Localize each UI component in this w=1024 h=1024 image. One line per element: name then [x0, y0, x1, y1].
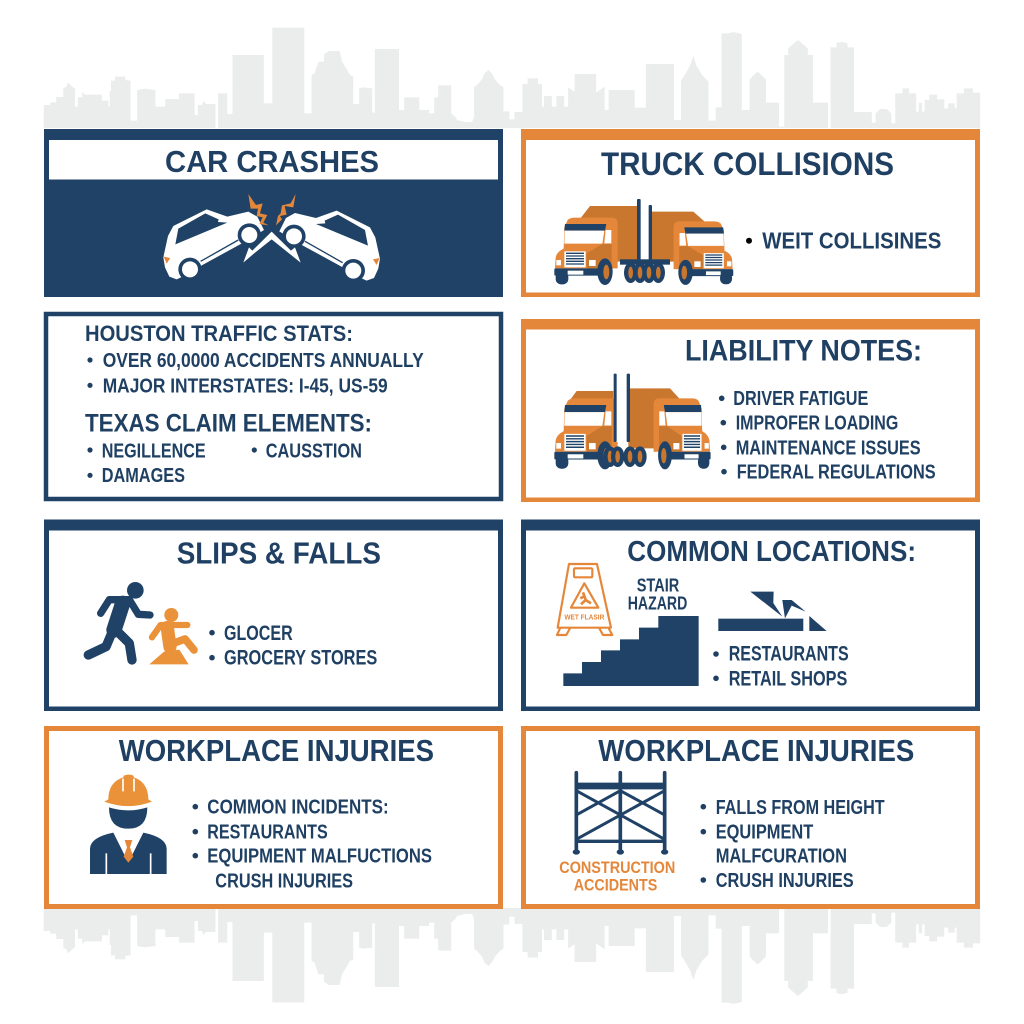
icon label: stair hazard	[628, 575, 687, 614]
heading: texas claim elements: TEXAS CLAIM ELEMENTS:	[85, 409, 372, 437]
list: common incidents: COMMON INCIDENTS:	[207, 797, 389, 819]
scaffold label: construction accidents	[559, 858, 675, 895]
list: traffic stats: MAJOR INTERSTATES: I-45, US-59	[103, 375, 388, 397]
panel: liability notes	[521, 319, 980, 502]
icon: two trucks	[554, 374, 711, 469]
icon: wet floor sign: WET FLASIR	[564, 615, 604, 622]
heading: common locations: COMMON LOCATIONS:	[627, 536, 916, 568]
list: liability factors: FEDERAL REGULATIONS	[737, 461, 936, 483]
panel: houston traffic stats	[46, 314, 501, 499]
list: traffic stats: OVER 60,0000 ACCIDENTS ANNUALLY	[103, 350, 424, 372]
heading: truck collisions: TRUCK COLLISIONS	[601, 146, 894, 182]
list: common incidents	[192, 797, 432, 892]
list: construction hazards	[700, 797, 885, 892]
list: construction hazards: CRUSH INJURIES	[716, 870, 854, 892]
list: liability factors: DRIVER FATIGUE	[733, 388, 868, 410]
heading: car crashes: CAR CRASHES	[165, 144, 379, 179]
bullet text: weit collisines: WEIT COLLISINES	[762, 228, 941, 254]
list: claim elements: CAUSSTION	[266, 440, 362, 462]
list: claim elements: DAMAGES	[102, 465, 185, 487]
skyline: bottom reflection	[44, 908, 980, 1004]
list: common incidents: RESTAURANTS	[207, 822, 328, 844]
heading: workplace injuries: WORKPLACE INJURIES	[119, 733, 434, 768]
list: claim elements	[87, 440, 362, 487]
list: slip locations: GLOCER	[224, 622, 293, 645]
icon: worker with hard hat	[90, 775, 167, 874]
list: liability factors	[719, 388, 936, 483]
panel: car crashes	[44, 129, 503, 297]
icon: two crashing cars	[163, 194, 380, 282]
list: traffic stats	[87, 350, 424, 397]
icon label: stair hazard: STAIR	[637, 575, 679, 595]
list: locations: RETAIL SHOPS	[729, 667, 847, 690]
list: liability factors: MAINTENANCE ISSUES	[736, 437, 921, 459]
list: slip locations	[209, 622, 377, 669]
list: claim elements: NEGILLENCE	[102, 440, 206, 462]
list: construction hazards: MALFCURATION	[716, 846, 847, 868]
heading: liability notes: LIABILITY NOTES:	[685, 335, 922, 368]
heading: slips and falls: SLIPS & FALLS	[177, 537, 381, 571]
list: slip locations: GROCERY STORES	[224, 646, 377, 669]
panel: common locations	[521, 520, 980, 711]
panel: slips and falls	[44, 520, 503, 711]
icon label: stair hazard: HAZARD	[628, 594, 687, 614]
icon: broken floor	[718, 592, 827, 631]
heading: workplace injuries: WORKPLACE INJURIES	[598, 733, 914, 768]
list: construction hazards: FALLS FROM HEIGHT	[716, 797, 885, 819]
icon: wet floor sign	[557, 564, 612, 635]
scaffold label: construction accidents: ACCIDENTS	[574, 876, 657, 895]
list: locations	[713, 643, 849, 690]
scaffold label: construction accidents: CONSTRUCTION	[559, 858, 675, 877]
list: common incidents: EQUIPMENT MALFUCTIONS	[207, 846, 432, 868]
icon: two trucks	[554, 199, 733, 285]
panel: workplace injuries, worker	[44, 726, 503, 909]
icon: running and falling figures	[88, 582, 194, 664]
icon: scaffold	[573, 773, 668, 855]
list: construction hazards: EQUIPMENT	[716, 821, 813, 843]
list: liability factors: IMPROFER LOADING	[736, 413, 898, 435]
skyline: top	[44, 28, 980, 128]
panel: truck collisions	[521, 129, 980, 297]
icon: stairs	[563, 616, 699, 686]
heading: houston traffic stats: HOUSTON TRAFFIC STATS:	[85, 321, 353, 346]
panel: workplace injuries, construction	[521, 726, 980, 909]
list: locations: RESTAURANTS	[729, 643, 849, 666]
list: common incidents: CRUSH INJURIES	[215, 870, 353, 892]
